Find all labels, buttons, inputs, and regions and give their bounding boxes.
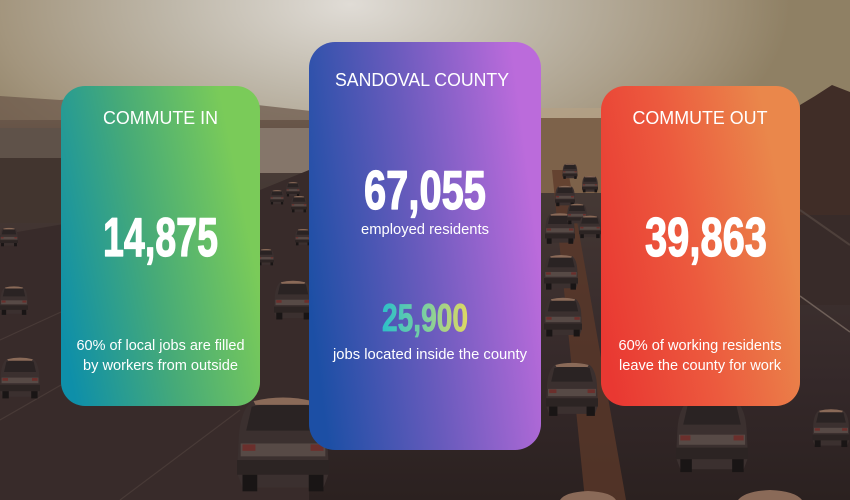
stat: 67,055: 67,055 [364,159,486,221]
road surface and lane markings [0,170,850,500]
description: commute out [618,338,782,374]
panel: commute out [601,86,800,406]
label: jobs located inside the county: jobs located inside the county [332,347,528,363]
stat: 14,875: 14,875 [103,206,218,268]
description: commute in [76,338,245,374]
description: commute out: 60% of working residents [618,338,782,354]
description: commute in: 60% of local jobs are filled [76,338,245,354]
heading: commute in: COMMUTE IN [103,108,218,128]
panel: commute in [61,86,260,406]
stat: 39,863: 39,863 [645,206,767,268]
description: commute in: by workers from outside [83,358,238,374]
traffic cars [0,164,849,500]
heading: sandoval county: SANDOVAL COUNTY [335,70,509,90]
heading: commute out: COMMUTE OUT [632,108,768,128]
stat: 25,900: 25,900 [382,297,468,340]
description: commute out: leave the county for work [619,358,782,374]
panel: sandoval county [309,42,541,450]
label: employed residents: employed residents [361,222,489,238]
